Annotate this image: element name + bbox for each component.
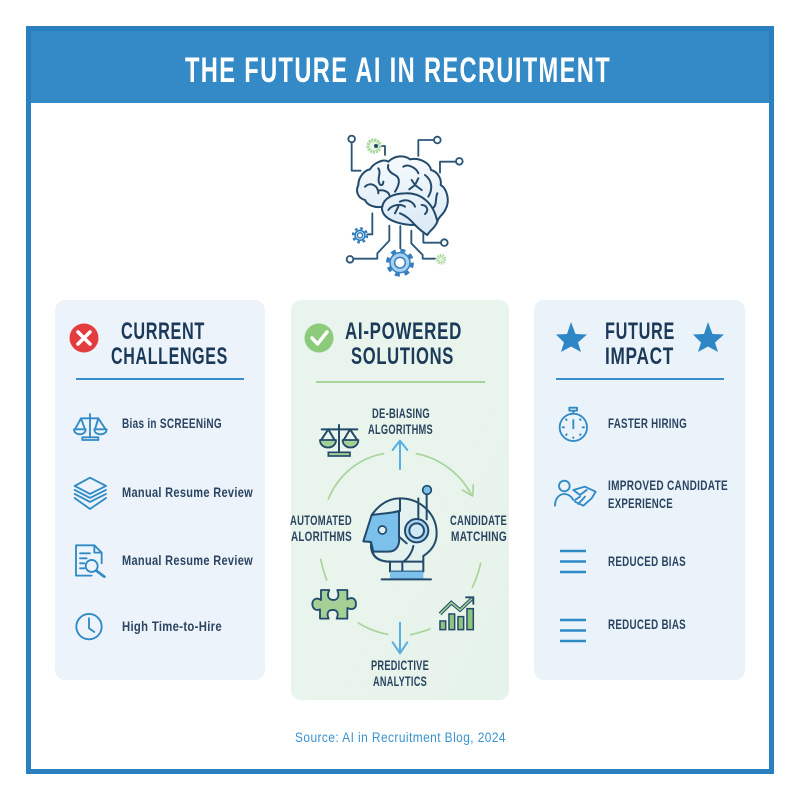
- icon: document search: [76, 545, 104, 577]
- source note: Source: AI in Recruitment Blog, 2024: [295, 729, 506, 745]
- label: de-biasing algorithms: [368, 405, 433, 437]
- heading: future impact: IMPACT: [605, 343, 674, 370]
- panel: current challenges: [55, 300, 265, 680]
- heading: AI-powered solutions: SOLUTIONS: [351, 343, 454, 370]
- text: faster hiring: FASTER HIRING: [608, 415, 687, 431]
- icon: red cross: [70, 324, 98, 352]
- label: automated algorithms: [290, 512, 352, 544]
- icon: list lines: [560, 620, 586, 641]
- label: de-biasing algorithms: DE-BIASING: [372, 405, 430, 421]
- icon: stacked layers: [75, 478, 106, 509]
- heading: AI-powered solutions: [345, 318, 462, 370]
- icon: AI brain circuit: [347, 136, 463, 275]
- label: automated algorithms: ALORITHMS: [291, 528, 352, 544]
- text: improved candidate experience: EXPERIENCE: [608, 495, 673, 511]
- heading: current challenges: CURRENT: [121, 318, 205, 345]
- panel: future impact: [534, 300, 745, 680]
- label: candidate matching: [450, 512, 507, 544]
- title: THE FUTURE AI IN RECRUITMENT: [185, 51, 611, 90]
- text: reduced bias: REDUCED BIAS: [608, 616, 686, 632]
- label: candidate matching: MATCHING: [451, 528, 507, 544]
- arrow: up: [393, 441, 407, 469]
- text: bias in screening: Bias in SCREENiNG: [122, 415, 222, 431]
- icon: puzzle piece: [312, 590, 356, 619]
- cycle arcs: [321, 454, 481, 635]
- icon: left star: [556, 322, 587, 352]
- label: automated algorithms: AUTOMATED: [290, 512, 352, 528]
- icons: puzzle and growth chart: [312, 590, 473, 630]
- label: predictive analytics: PREDICTIVE: [371, 657, 429, 673]
- text: high time-to-hire: High Time-to-Hire: [122, 618, 222, 634]
- icon: growth chart: [440, 597, 473, 630]
- text: improved candidate experience: [608, 477, 728, 511]
- text: manual resume review: Manual Resume Review: [122, 484, 253, 500]
- label: de-biasing algorithms: ALGORITHMS: [368, 421, 433, 437]
- icon: stopwatch: [560, 408, 587, 441]
- icon: list lines: [560, 551, 586, 572]
- icon: scales: [320, 425, 358, 456]
- icon: clock: [76, 614, 102, 639]
- heading: AI-powered solutions: AI-POWERED: [345, 318, 462, 345]
- icon: AI head: [363, 486, 437, 579]
- icon: green check: [304, 324, 334, 352]
- solutions cycle diagram: [320, 425, 481, 653]
- arrow: down: [393, 623, 407, 653]
- panel: AI-powered solutions: [290, 300, 509, 700]
- heading: future impact: [605, 318, 675, 370]
- label: predictive analytics: ANALYTICS: [373, 673, 427, 689]
- text: improved candidate experience: IMPROVED CANDIDATE: [608, 477, 728, 493]
- heading: future impact: FUTURE: [605, 318, 675, 345]
- icon: scales: [74, 414, 107, 440]
- title banner: [31, 31, 769, 103]
- icon: person and handshake: [555, 481, 596, 506]
- label: candidate matching: CANDIDATE: [450, 512, 507, 528]
- brain: [357, 156, 448, 235]
- text: manual resume review: Manual Resume Review: [122, 552, 253, 568]
- text: reduced bias: REDUCED BIAS: [608, 553, 686, 569]
- heading: current challenges: CHALLENGES: [111, 343, 228, 370]
- circuit lines and nodes: [347, 136, 463, 275]
- icon: right star: [693, 322, 724, 352]
- heading: current challenges: [111, 318, 228, 370]
- label: predictive analytics: [371, 657, 429, 689]
